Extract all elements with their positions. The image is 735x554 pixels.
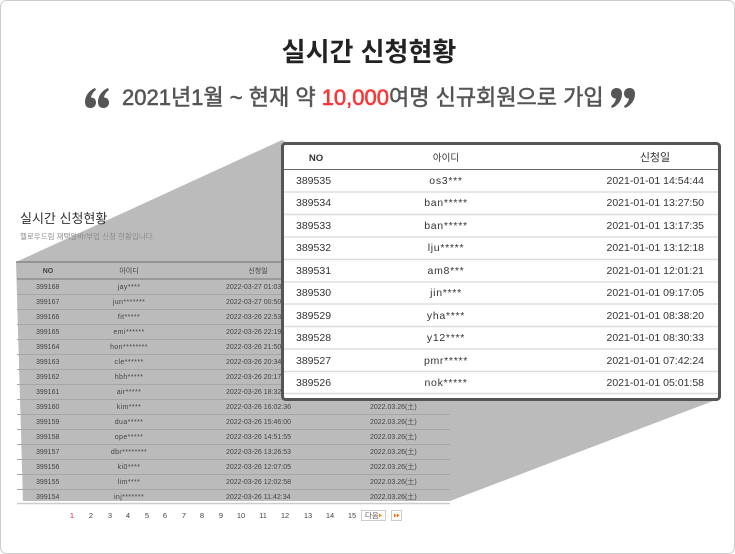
background table header: 아이디 bbox=[119, 266, 139, 275]
background table rows: 2022.03.26(土) bbox=[370, 477, 417, 486]
main table rows: 2021-01-01 08:30:33 bbox=[606, 332, 704, 344]
background table rows: hbh***** bbox=[115, 374, 143, 381]
background table rows: 399154 bbox=[36, 494, 59, 501]
background table rows: 2022.03.26(土) bbox=[370, 492, 417, 501]
pagination: 13 bbox=[304, 511, 312, 520]
background table rows: 399163 bbox=[36, 359, 59, 366]
background table rows: 399155 bbox=[36, 479, 59, 486]
main table rows bbox=[296, 175, 704, 389]
main table rows: 2021-01-01 13:17:35 bbox=[606, 220, 704, 232]
background table rows: fit***** bbox=[118, 314, 140, 321]
main table rows: 389533 bbox=[296, 220, 331, 232]
background table rows: ki0**** bbox=[118, 464, 140, 471]
main table rows: 2021-01-01 08:38:20 bbox=[606, 310, 704, 322]
pagination: 1 bbox=[70, 511, 74, 520]
main table rows: 389528 bbox=[296, 332, 331, 344]
last page button bbox=[392, 510, 402, 520]
background table rows: 399161 bbox=[36, 389, 59, 396]
subtitle text: 2021년1월 ~ 현재 약 10,000여명 신규회원으로 가입 bbox=[122, 85, 604, 110]
pagination: 7 bbox=[182, 511, 186, 520]
main table rows: 389530 bbox=[296, 287, 331, 299]
background table rows: 2022-03-26 12:07:05 bbox=[226, 464, 291, 471]
main table rows: 2021-01-01 12:01:21 bbox=[606, 265, 704, 277]
main table header: NO bbox=[309, 153, 323, 164]
background table rows: 2022-03-26 20:17 bbox=[226, 374, 281, 381]
main table rows: lju***** bbox=[428, 242, 464, 254]
background table rows: 2022-03-26 11:42:34 bbox=[226, 494, 291, 501]
pagination: 10 bbox=[237, 511, 245, 520]
main table rows: 389526 bbox=[296, 377, 331, 389]
main table header: 아이디 bbox=[433, 153, 459, 164]
background table rows: dua***** bbox=[115, 419, 143, 426]
subtitle with quote marks bbox=[85, 85, 635, 110]
background table rows: air***** bbox=[117, 389, 141, 396]
background table rows: hon******** bbox=[110, 344, 148, 351]
main table header: 신청일 bbox=[640, 150, 670, 164]
small list description: 헬로우드림 재택알바/부업 신청 현황입니다. bbox=[20, 231, 155, 241]
pagination: 12 bbox=[281, 511, 289, 520]
main table rows: 389527 bbox=[296, 355, 331, 367]
pagination: 4 bbox=[126, 511, 130, 520]
main table panel bbox=[282, 144, 720, 400]
main table rows: yha**** bbox=[427, 310, 465, 322]
background table rows: 399166 bbox=[36, 314, 59, 321]
background table header bbox=[43, 266, 268, 275]
background table rows: cle****** bbox=[115, 359, 143, 366]
background table rows: 399159 bbox=[36, 419, 59, 426]
main table rows: 2021-01-01 09:17:05 bbox=[606, 287, 704, 299]
background table rows: 2022-03-26 12:02:58 bbox=[226, 479, 291, 486]
main table rows: jin**** bbox=[429, 287, 462, 299]
background table rows: 2022-03-26 18:32 bbox=[226, 389, 281, 396]
background table rows: 2022-03-26 21:50 bbox=[226, 344, 281, 351]
background table rows: lim**** bbox=[118, 479, 140, 486]
background table rows: 399156 bbox=[36, 464, 59, 471]
background table rows: jun******* bbox=[112, 299, 145, 306]
pagination: 3 bbox=[108, 511, 112, 520]
background table header: 신청일 bbox=[248, 266, 268, 275]
background table rows: 399157 bbox=[36, 449, 59, 456]
pagination: 8 bbox=[200, 511, 204, 520]
background table rows bbox=[36, 284, 417, 501]
pagination: 2 bbox=[89, 511, 93, 520]
pagination: 15 bbox=[348, 511, 356, 520]
main table rows: pmr***** bbox=[424, 355, 468, 367]
background table rows: 399158 bbox=[36, 434, 59, 441]
main table rows: nok***** bbox=[425, 377, 467, 389]
main table rows: am8*** bbox=[428, 265, 464, 277]
background table rows: 2022-03-26 22:19 bbox=[226, 329, 281, 336]
main table rows: 2021-01-01 05:01:58 bbox=[606, 377, 704, 389]
main table rows: 2021-01-01 13:27:50 bbox=[606, 197, 704, 209]
next page button bbox=[362, 510, 386, 520]
icon: closing quote bbox=[611, 88, 635, 108]
main table header bbox=[309, 150, 670, 164]
background table rows: 2022.03.26(土) bbox=[370, 432, 417, 441]
main table rows: 2021-01-01 07:42:24 bbox=[606, 355, 704, 367]
small list heading: 실시간 신청현황 bbox=[20, 211, 107, 226]
main table rows: ban***** bbox=[424, 220, 468, 232]
background table rows: kim**** bbox=[117, 404, 141, 411]
background table rows: jay**** bbox=[117, 284, 140, 291]
background table rows: emi****** bbox=[113, 329, 145, 336]
pagination: 14 bbox=[326, 511, 334, 520]
pagination: 9 bbox=[219, 511, 223, 520]
main table rows: 389531 bbox=[296, 265, 331, 277]
background table rows: 2022.03.26(土) bbox=[370, 447, 417, 456]
background table rows: 2022-03-26 13:26:53 bbox=[226, 449, 291, 456]
background table rows: 2022.03.26(土) bbox=[370, 417, 417, 426]
main table rows: 389535 bbox=[296, 175, 331, 187]
title: 실시간 신청현황 bbox=[282, 37, 456, 67]
main table rows: 389534 bbox=[296, 197, 331, 209]
icon: opening quote bbox=[85, 88, 109, 108]
main table rows: 389529 bbox=[296, 310, 331, 322]
main table rows: os3*** bbox=[429, 175, 463, 187]
background table rows: 2022-03-26 14:51:55 bbox=[226, 434, 291, 441]
background table rows: 2022-03-27 00:50 bbox=[226, 299, 281, 306]
pagination bbox=[70, 510, 402, 520]
background table header: NO bbox=[43, 268, 54, 275]
main table rows: 389532 bbox=[296, 242, 331, 254]
background table rows: ope***** bbox=[115, 434, 143, 441]
background table rows: 2022-03-26 15:46:00 bbox=[226, 419, 291, 426]
background table rows: 399162 bbox=[36, 374, 59, 381]
background table rows: 399167 bbox=[36, 299, 59, 306]
background table rows: 399168 bbox=[36, 284, 59, 291]
background table rows: 2022-03-26 22:53 bbox=[226, 314, 281, 321]
background table bbox=[16, 262, 450, 504]
background table rows: 2022-03-27 01:03 bbox=[226, 284, 281, 291]
background table rows: 399164 bbox=[36, 344, 59, 351]
main table rows: ban***** bbox=[424, 197, 468, 209]
pagination: 5 bbox=[145, 511, 149, 520]
main table rows: y12**** bbox=[427, 332, 465, 344]
next page button: 다음 bbox=[365, 511, 379, 520]
main table rows: 2021-01-01 13:12:18 bbox=[606, 242, 704, 254]
background table rows: 2022.03.26(土) bbox=[370, 462, 417, 471]
gray zoom projection bbox=[16, 140, 721, 501]
background table rows: 399160 bbox=[36, 404, 59, 411]
pagination: 11 bbox=[259, 511, 267, 520]
background table rows: dbr******** bbox=[111, 449, 147, 456]
main table rows: 2021-01-01 14:54:44 bbox=[606, 175, 704, 187]
pagination: 6 bbox=[163, 511, 167, 520]
background table rows: inj******* bbox=[114, 494, 144, 501]
background table rows: 2022-03-26 20:34 bbox=[226, 359, 281, 366]
background table rows: 399165 bbox=[36, 329, 59, 336]
background table rows: 2022.03.26(土) bbox=[370, 402, 417, 411]
background table rows: 2022-03-26 16:02:36 bbox=[226, 404, 291, 411]
